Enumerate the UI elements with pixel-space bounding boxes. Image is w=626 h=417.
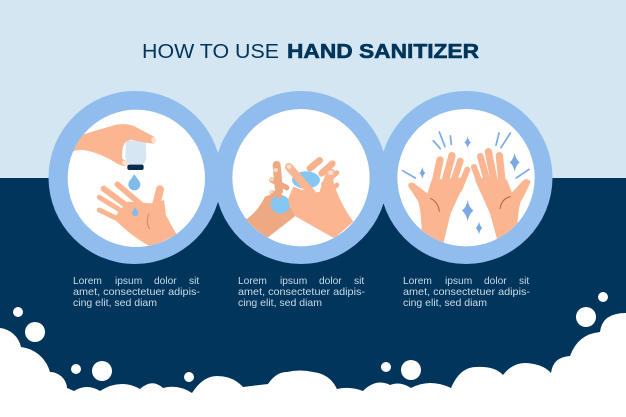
- foam clouds: [0, 313, 626, 417]
- floating bubbles: [13, 292, 608, 382]
- icon: front hand: [287, 165, 353, 238]
- icon: shine lines: [403, 132, 529, 178]
- icon: sanitizer bottle: [125, 140, 146, 170]
- title: HOW TO USE: [142, 40, 279, 63]
- text block 3: sit: [519, 276, 529, 287]
- blue ring circles: [48, 91, 552, 264]
- text block 3: Lorem: [403, 276, 432, 287]
- icon: right raised hand: [474, 152, 531, 240]
- text block 3: amet, consectetuer adipis-: [403, 287, 530, 298]
- text block 1: sit: [189, 276, 199, 287]
- icon: sparkles: [419, 136, 520, 234]
- text block 2: ipsum: [280, 276, 307, 287]
- text block 2: sit: [354, 276, 364, 287]
- text block 2: amet, consectetuer adipis-: [238, 287, 365, 298]
- text block 2: dolor: [319, 276, 342, 287]
- dark navy background: [0, 178, 626, 417]
- text block 3: dolor: [484, 276, 507, 287]
- icon: back hand arm: [246, 194, 296, 238]
- icon: lower open hand: [99, 184, 177, 247]
- icon: left raised hand: [408, 156, 467, 243]
- icon: top hand holding bottle: [70, 124, 156, 166]
- icon: back hand fingers: [269, 160, 337, 196]
- text block 1: dolor: [154, 276, 177, 287]
- text block 3: [403, 276, 530, 309]
- text block 3: ipsum: [445, 276, 472, 287]
- text block 1: Lorem: [73, 276, 102, 287]
- panel: step 2 rubbing hands: [232, 109, 370, 246]
- text block 2: [238, 276, 365, 309]
- icon: soap foam: [271, 171, 320, 214]
- text block 2: cing elit, sed diam: [238, 298, 322, 309]
- title: HAND SANITIZER: [287, 40, 479, 63]
- text block 3: cing elit, sed diam: [403, 298, 487, 309]
- text block 1: ipsum: [115, 276, 142, 287]
- text block 1: [73, 276, 200, 309]
- panel: step 3 clean hands: [397, 109, 535, 246]
- icon: sanitizer drop: [128, 174, 140, 190]
- light header background: [0, 0, 626, 178]
- text block 1: cing elit, sed diam: [73, 298, 157, 309]
- title: [142, 40, 479, 63]
- text block 1: amet, consectetuer adipis-: [73, 287, 200, 298]
- panel: step 1 apply sanitizer: [68, 110, 205, 247]
- text block 2: Lorem: [238, 276, 267, 287]
